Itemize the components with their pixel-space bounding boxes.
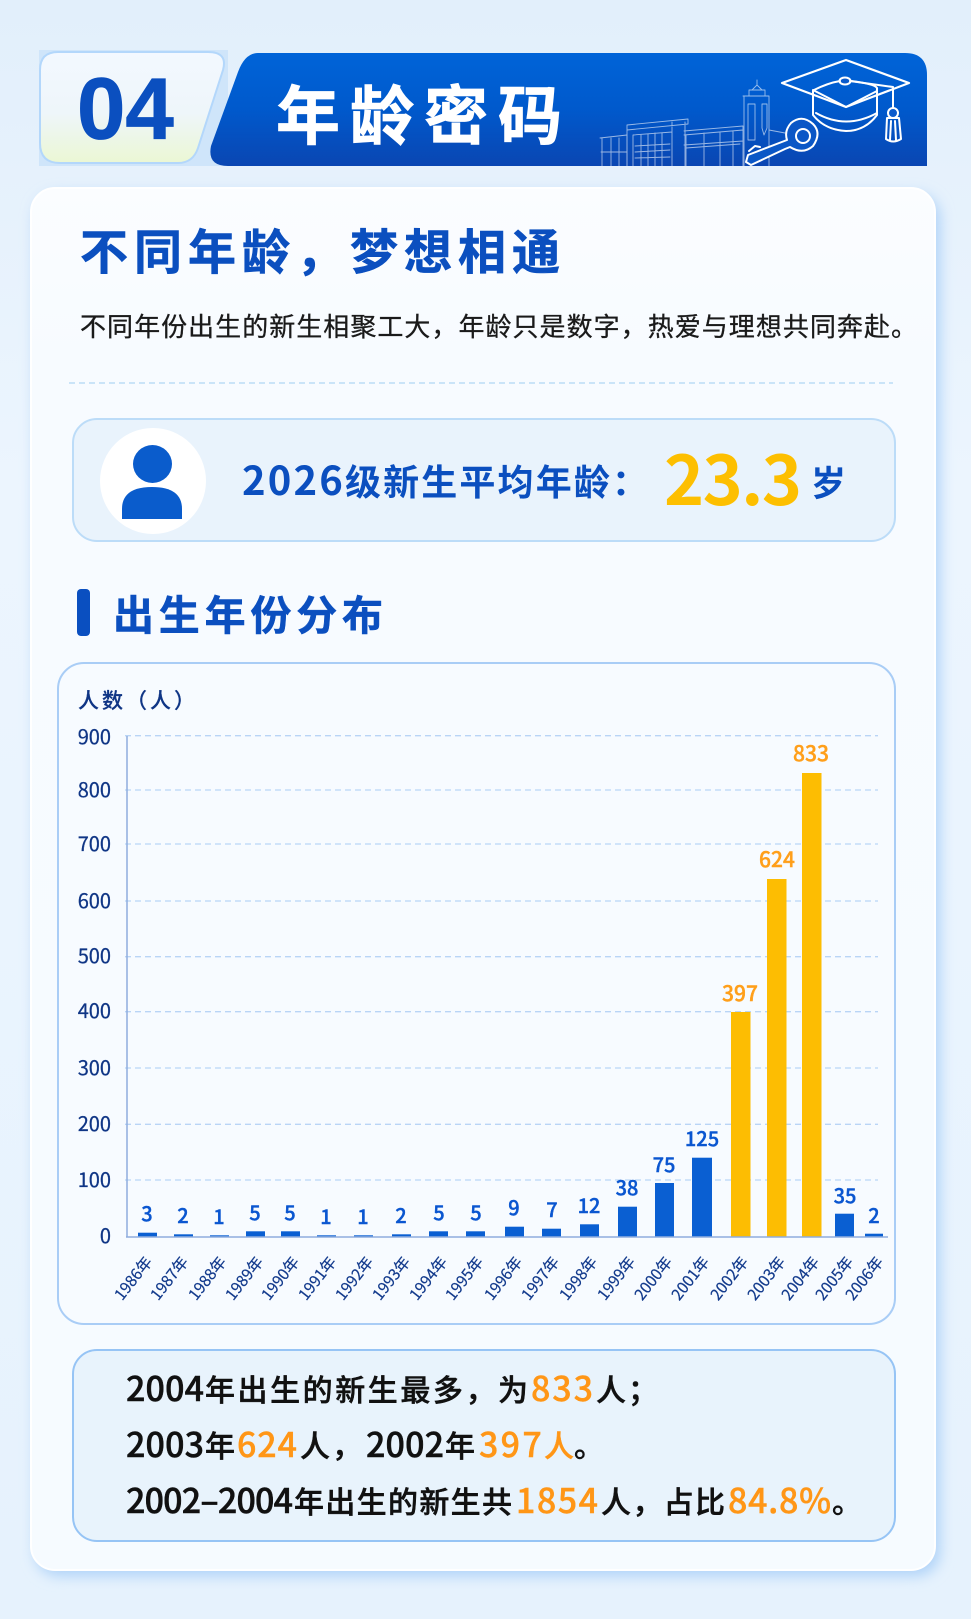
bar value labels: 1 bbox=[357, 1201, 369, 1230]
text: intro sentence: 不同年份出生的新生相聚工大，年龄只是数字，热爱与理想共同奔赴。 bbox=[80, 307, 917, 344]
heading: 不同年龄，梦想相通: 不同年龄，梦想相通 bbox=[80, 213, 560, 283]
x axis year labels: 1992年 bbox=[330, 1252, 378, 1304]
x axis year labels bbox=[109, 1252, 888, 1304]
x axis year labels: 2005年 bbox=[810, 1252, 858, 1304]
x axis year labels: 2000年 bbox=[629, 1252, 677, 1304]
panel: average age bbox=[73, 419, 895, 541]
y axis labels: 200 bbox=[78, 1108, 111, 1137]
y axis labels: 300 bbox=[78, 1052, 111, 1081]
bar value labels bbox=[141, 738, 880, 1230]
text: line 2: 年 bbox=[205, 1422, 235, 1466]
y axis labels: 500 bbox=[78, 940, 111, 969]
panel: bar chart of birth years bbox=[58, 663, 895, 1324]
bar value labels: 1 bbox=[213, 1201, 225, 1230]
bars: blue years bbox=[138, 1158, 883, 1237]
text: line 2: 年 bbox=[445, 1422, 475, 1466]
bar value labels: 397 bbox=[722, 978, 758, 1008]
x axis year labels: 1991年 bbox=[293, 1252, 341, 1304]
text: average age label: 2026级新生平均年龄： bbox=[242, 449, 648, 507]
text: line 3: 年出生的新生共 bbox=[294, 1478, 512, 1522]
text: line 2 bbox=[126, 1418, 604, 1467]
heading: birth year distribution: 出生年份分布 bbox=[113, 582, 383, 642]
text: line 1: 2004 bbox=[126, 1362, 204, 1411]
bar value labels: 2 bbox=[177, 1200, 189, 1229]
illustration: campus building, key and graduation cap bbox=[600, 60, 909, 168]
bar value labels: 2 bbox=[395, 1200, 407, 1229]
x axis year labels: 1997年 bbox=[516, 1252, 564, 1304]
x axis year labels: 1995年 bbox=[440, 1252, 488, 1304]
bar value labels: 5 bbox=[433, 1197, 445, 1226]
bar value labels: 75 bbox=[653, 1149, 675, 1178]
number: 23.3: 23.3 bbox=[664, 426, 802, 525]
y axis labels: 800 bbox=[78, 774, 111, 803]
bar value labels: 125 bbox=[685, 1123, 719, 1152]
text: line 1: 833 bbox=[531, 1362, 593, 1411]
text: line 2: 397人 bbox=[479, 1418, 574, 1467]
y axis labels bbox=[78, 721, 111, 1249]
x axis year labels: 1987年 bbox=[145, 1252, 193, 1304]
badge: section number 04: 04 bbox=[77, 60, 174, 158]
x axis year labels: 2001年 bbox=[666, 1252, 714, 1304]
axis title: 人数（人） bbox=[78, 685, 195, 715]
panel: key findings bbox=[73, 1350, 895, 1541]
y axis labels: 400 bbox=[78, 995, 111, 1024]
x axis year labels: 2006年 bbox=[840, 1252, 888, 1304]
bar value labels: 9 bbox=[508, 1192, 520, 1221]
y axis labels: 600 bbox=[78, 885, 111, 914]
text: line 2: 2002 bbox=[366, 1418, 444, 1467]
y axis labels: 700 bbox=[78, 828, 111, 857]
bar value labels: 2 bbox=[868, 1200, 880, 1229]
x axis year labels: 1999年 bbox=[592, 1252, 640, 1304]
text: line 3: 。 bbox=[832, 1478, 862, 1522]
x axis year labels: 2002年 bbox=[705, 1252, 753, 1304]
badge: section number 04 bbox=[39, 50, 228, 166]
text: line 1 bbox=[126, 1362, 658, 1411]
banner: section heading bbox=[210, 53, 927, 168]
text: line 3 bbox=[126, 1474, 862, 1523]
x axis year labels: 2003年 bbox=[742, 1252, 790, 1304]
icon: person avatar bbox=[100, 428, 206, 534]
text: unit 岁: 岁 bbox=[811, 456, 846, 507]
bar value labels: 12 bbox=[578, 1190, 600, 1219]
text: line 3: 2002–2004 bbox=[126, 1474, 293, 1523]
bar value labels: 35 bbox=[834, 1180, 856, 1209]
text: line 3: 人，占比 bbox=[601, 1478, 725, 1522]
bar value labels: 1 bbox=[320, 1201, 332, 1230]
text: line 3: 1854 bbox=[516, 1474, 598, 1523]
bar value labels: 7 bbox=[546, 1194, 558, 1223]
y axis labels: 900 bbox=[78, 721, 111, 750]
bar value labels: 5 bbox=[249, 1197, 261, 1226]
bar value labels: 38 bbox=[616, 1172, 638, 1201]
y axis labels: 0 bbox=[100, 1220, 111, 1249]
heading: 年龄密码: 年龄密码 bbox=[276, 66, 562, 158]
x axis year labels: 1993年 bbox=[367, 1252, 415, 1304]
x axis year labels: 2004年 bbox=[776, 1252, 824, 1304]
text: line 1: 人； bbox=[596, 1366, 658, 1410]
x axis year labels: 1989年 bbox=[220, 1252, 268, 1304]
x axis year labels: 1996年 bbox=[479, 1252, 527, 1304]
bar value labels: 5 bbox=[284, 1197, 296, 1226]
x axis year labels: 1988年 bbox=[183, 1252, 231, 1304]
text: line 3: 84.8% bbox=[728, 1474, 831, 1523]
x axis year labels: 1998年 bbox=[554, 1252, 602, 1304]
x axis year labels: 1994年 bbox=[404, 1252, 452, 1304]
bar value labels: 3 bbox=[141, 1198, 153, 1227]
text: line 1: 年出生的新生最多，为 bbox=[205, 1366, 528, 1410]
text: line 2: 624 bbox=[237, 1418, 297, 1467]
text: line 2: 人， bbox=[300, 1422, 362, 1466]
x axis year labels: 1990年 bbox=[256, 1252, 304, 1304]
text: line 2: 2003 bbox=[126, 1418, 204, 1467]
bar value labels: 5 bbox=[470, 1197, 482, 1226]
y axis labels: 100 bbox=[78, 1164, 111, 1193]
x axis year labels: 1986年 bbox=[109, 1252, 157, 1304]
bar value labels: 624 bbox=[759, 844, 795, 874]
bar value labels: 833 bbox=[793, 738, 829, 768]
text: line 2: 。 bbox=[574, 1422, 604, 1466]
bars: highlighted years 2002-2004 bbox=[731, 773, 822, 1237]
